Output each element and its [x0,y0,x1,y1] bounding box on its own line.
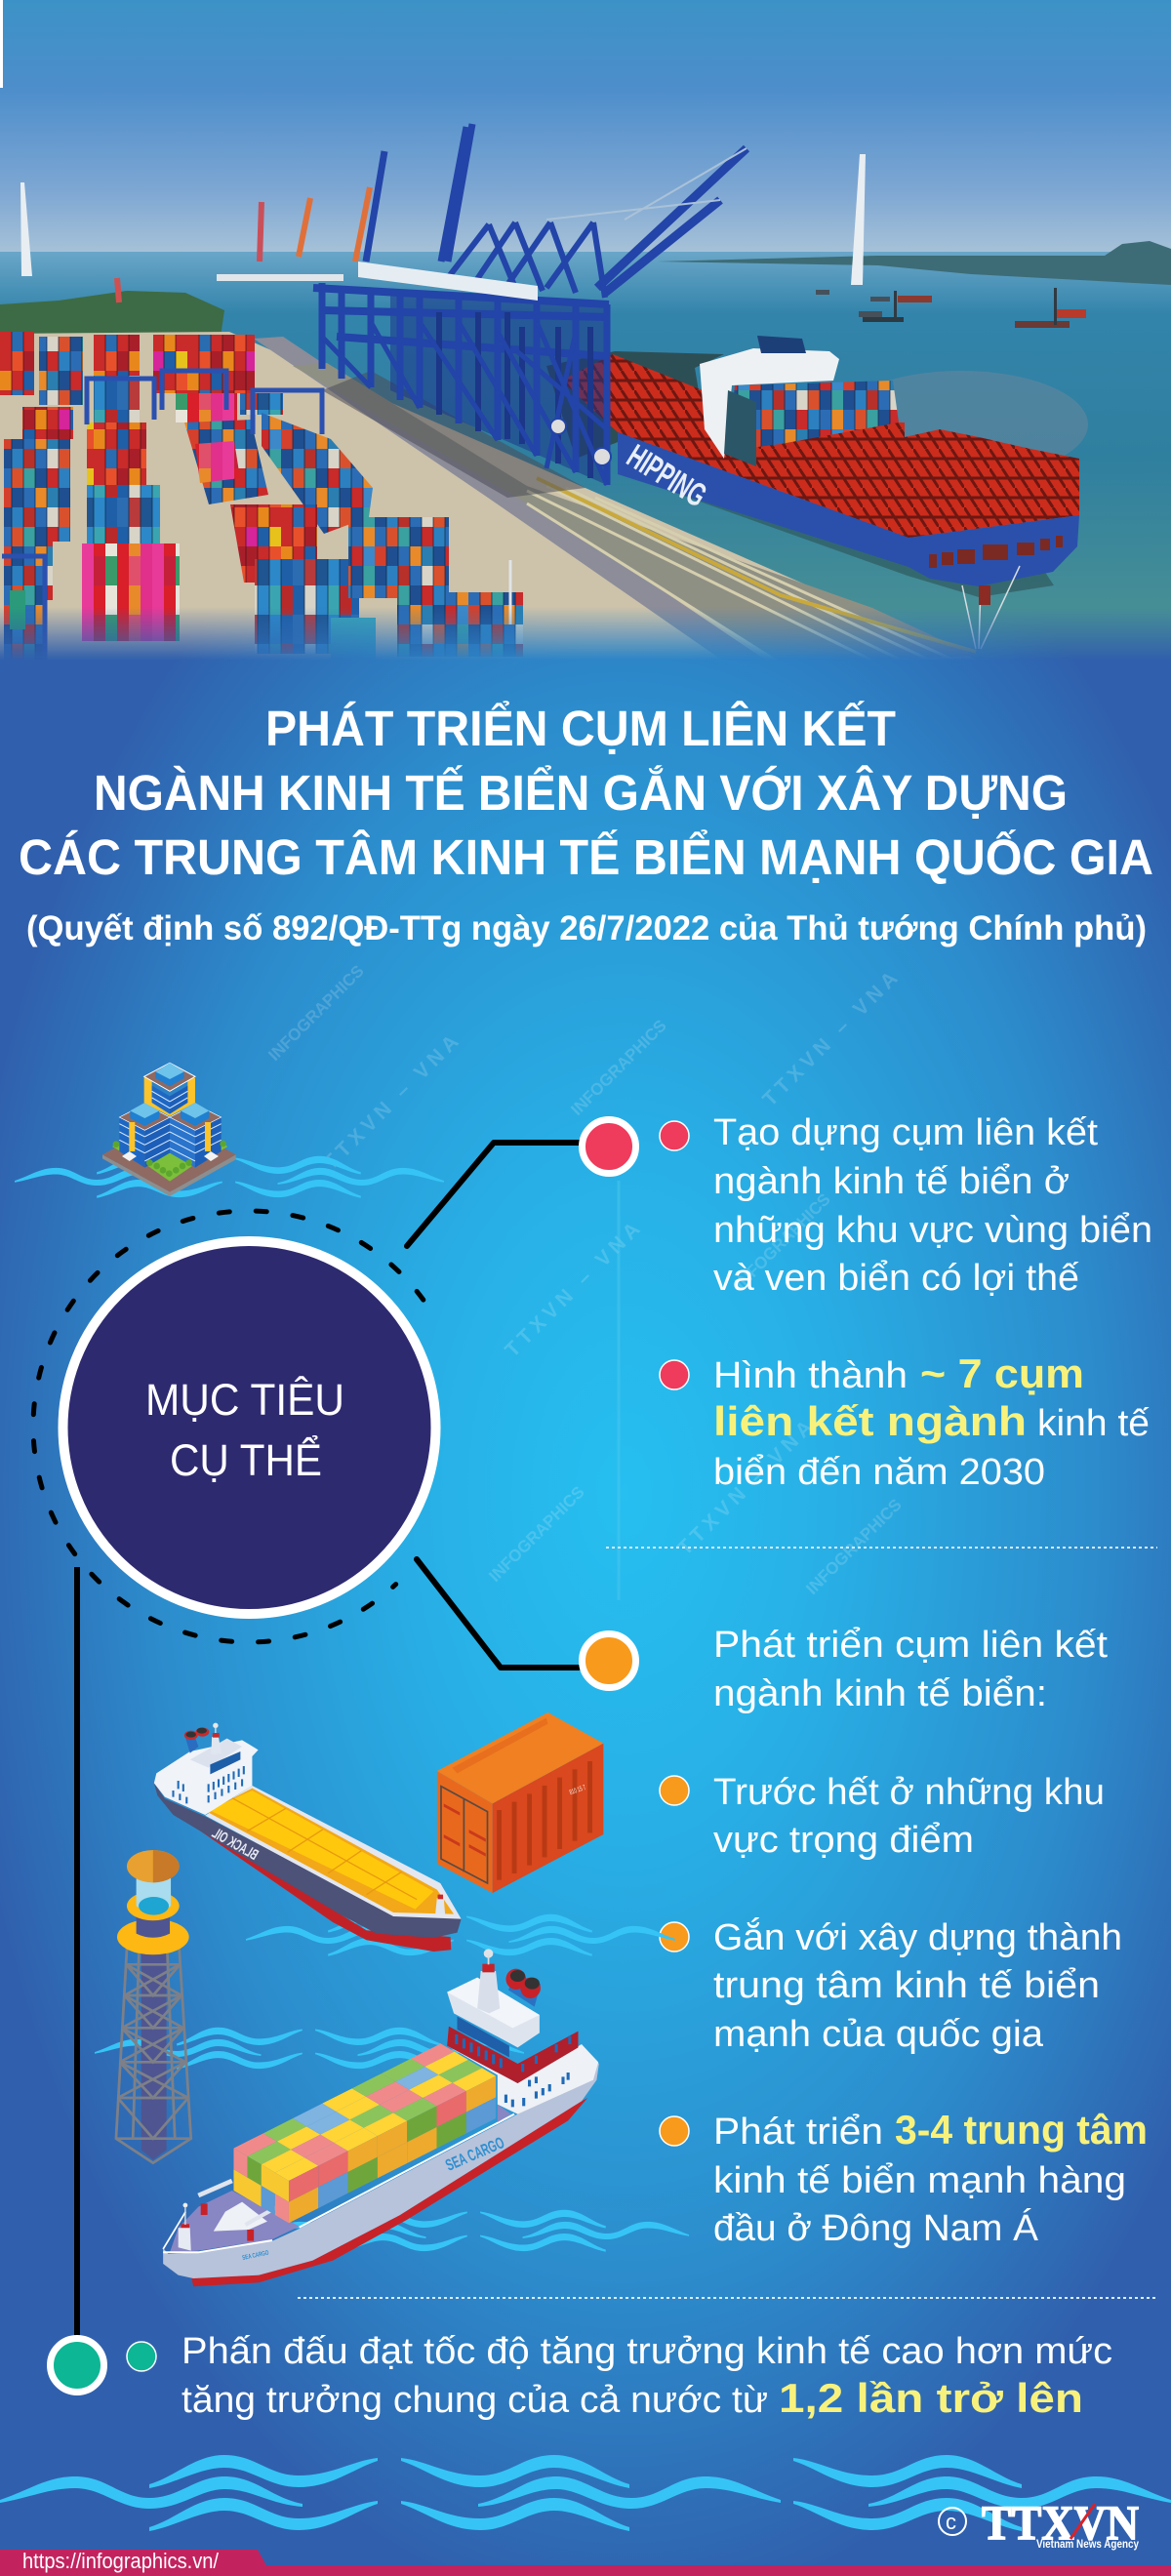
text: coastal clusters: và ven biển có lợi thế [713,1258,1079,1299]
sea [0,252,1171,664]
node: green [51,2338,103,2393]
node: red [582,1120,636,1173]
bow name: SEA CARGO [242,2250,269,2262]
superstructure [700,348,839,459]
title [19,700,1153,885]
watermarks: TTXVN – VNA [319,1030,463,1175]
mooring lines [962,566,1020,649]
red lashing frames [561,354,1079,538]
text: national centres: mạnh của quốc gia [713,2014,1044,2055]
header photo: container port [0,0,1171,664]
bullet orange 3 [660,2116,689,2146]
watermarks: INFOGRAPHICS [731,1189,834,1293]
stern windows [929,536,1063,568]
text: national centres: trung tâm kinh tế biển [713,1965,1100,2006]
text: growth target [182,2331,1112,2421]
title: NGÀNH KINH TẾ BIỂN GẮN VỚI XÂY DỰNG [94,764,1068,821]
text: coastal clusters: Tạo dựng cụm liên kết [713,1112,1098,1153]
bullet green [127,2342,156,2371]
watermark stamps: INFOGRAPHICS [264,961,368,1065]
distant masts [117,187,370,302]
logo: TTXVN: c [946,2510,956,2534]
yard gantries [2,371,322,664]
far crane deck [217,274,343,281]
text: orange heading [713,1625,1108,1714]
text: orange heading: ngành kinh tế biển: [713,1673,1047,1714]
title: PHÁT TRIỂN CỤM LIÊN KẾT [265,700,896,756]
cargo front end [233,2149,289,2223]
watermarks: TTXVN – VNA [246,1469,389,1614]
ship hull and cargo [546,336,1079,649]
mid containers [728,381,899,451]
text: growth target: tăng trưởng chung của cả nước từ [182,2380,768,2421]
watermarks [246,961,906,1614]
text: 7 clusters: ~ 7 cụm [920,1350,1084,1396]
bullet red 2 [660,1360,689,1389]
watermarks: INFOGRAPHICS [567,1016,670,1119]
text: growth target: 1,2 lần trở lên [779,2375,1083,2421]
bullet red [660,1121,689,1150]
icon: lighthouse head [117,1850,189,1954]
central circle: objectives: CỤ THỂ [170,1435,322,1485]
hull [618,432,1079,586]
connector: circle to red node [407,1143,579,1246]
waves behind building [15,1156,444,1198]
crane cabins [358,262,538,301]
dark tall stack [724,390,756,466]
text: key areas: Trước hết ở những khu [713,1772,1105,1813]
island trees [0,291,224,337]
bullet orange 2 [660,1922,689,1952]
water patch [888,371,1088,456]
central circle: objectives: MỤC TIÊU [145,1375,344,1425]
footer bar with url: https://infographics.vn/ [22,2549,220,2573]
cargo long side [289,2076,496,2223]
subtitle: (Quyết định số 892/QĐ-TTg ngày 26/7/2022 của Thủ tướng Chính phủ) [26,909,1147,947]
text: coastal clusters [713,1112,1152,1299]
watermarks: INFOGRAPHICS [302,1301,405,1404]
watermarks: TTXVN – VNA [501,1218,644,1362]
text: orange heading: Phát triển cụm liên kết [713,1625,1108,1666]
sky [0,0,1171,256]
block: orange goals [660,1625,1148,2249]
text: key areas [713,1772,1105,1861]
hull name: BLACK OIL [209,1825,261,1864]
logo: TTXVN: TTXVN [982,2495,1139,2550]
icon: lighthouse tower [116,1932,191,2163]
bridge top [757,336,806,353]
icon: container ship [163,1949,599,2286]
tower left [20,182,32,276]
crane dark mass [390,293,607,485]
footer waves [0,2455,1171,2531]
connector: circle to orange node [417,1559,579,1668]
watermarks: INFOGRAPHICS [802,1495,906,1598]
icon: tanker ship [154,1723,462,1952]
port ground [0,332,804,656]
text: 7 clusters: kinh tế [1037,1403,1150,1444]
rudder [979,585,990,605]
container stacks [0,332,523,664]
waves near tanker [246,1914,675,1956]
text: 7 clusters: biển đến năm 2030 [713,1452,1045,1493]
crane shadows [322,371,586,498]
far shore [657,241,1171,285]
text: coastal clusters: ngành kinh tế biển ở [713,1161,1070,1202]
text: national centres: Gắn với xây dựng thành [713,1916,1122,1958]
dashed orbit [33,1211,424,1642]
watermarks: TTXVN – VNA [758,967,902,1111]
text: national centres [713,1916,1122,2055]
node: orange [582,1633,636,1688]
faint vertical guide [617,1181,621,1600]
text: 3-4 centres: đầu ở Đông Nam Á [713,2207,1039,2249]
text: 7 clusters [713,1350,1150,1493]
bullet orange 1 [660,1776,689,1805]
text: 3-4 centres: 3-4 trung tâm [895,2107,1148,2153]
quay cranes [313,124,747,485]
cargo top cells [233,2043,496,2181]
block: red goals [660,1112,1152,1493]
tower right [851,154,866,285]
text: 3-4 centres: Phát triển [713,2112,883,2153]
crane leg wheels [550,419,611,465]
bottom goal [127,2331,1112,2421]
waves behind cargo ship left [95,2028,524,2070]
small boats [816,288,1086,328]
central circle: objectives [62,1241,435,1614]
text: key areas: vực trọng điểm [713,1820,974,1861]
text: coastal clusters: những khu vực vùng biển [713,1210,1152,1251]
text: 3-4 centres: kinh tế biển mạnh hàng [713,2160,1126,2201]
rail lines [527,478,976,664]
text: 3-4 centres [713,2107,1148,2249]
rail zone [293,363,976,664]
footer bar with url [0,2549,1171,2576]
logo: TTXVN: Vietnam News Agency [1036,2537,1139,2551]
sky edge notch [0,0,3,88]
hull name: SEA CARGO [443,2133,507,2175]
container code: 810 15 7 [568,1783,586,1796]
connector: circle to green node [74,1567,80,2338]
text: 7 clusters: Hình thành [713,1355,908,1396]
text: 7 clusters: liên kết ngành [713,1398,1027,1444]
quay grey band [254,337,771,664]
watermarks: INFOGRAPHICS [485,1482,588,1586]
icon: island building [102,1063,236,1196]
icon: orange container [437,1712,603,1893]
cargo behind bridge [546,351,724,459]
waves under cargo ship right [260,2210,689,2252]
watermarks: TTXVN – VNA [673,1416,817,1560]
text: growth target: Phấn đấu đạt tốc độ tăng trưởng kinh tế cao hơn mức [182,2331,1112,2372]
light pole [509,560,511,624]
hull lettering: HIPPING [621,438,713,514]
